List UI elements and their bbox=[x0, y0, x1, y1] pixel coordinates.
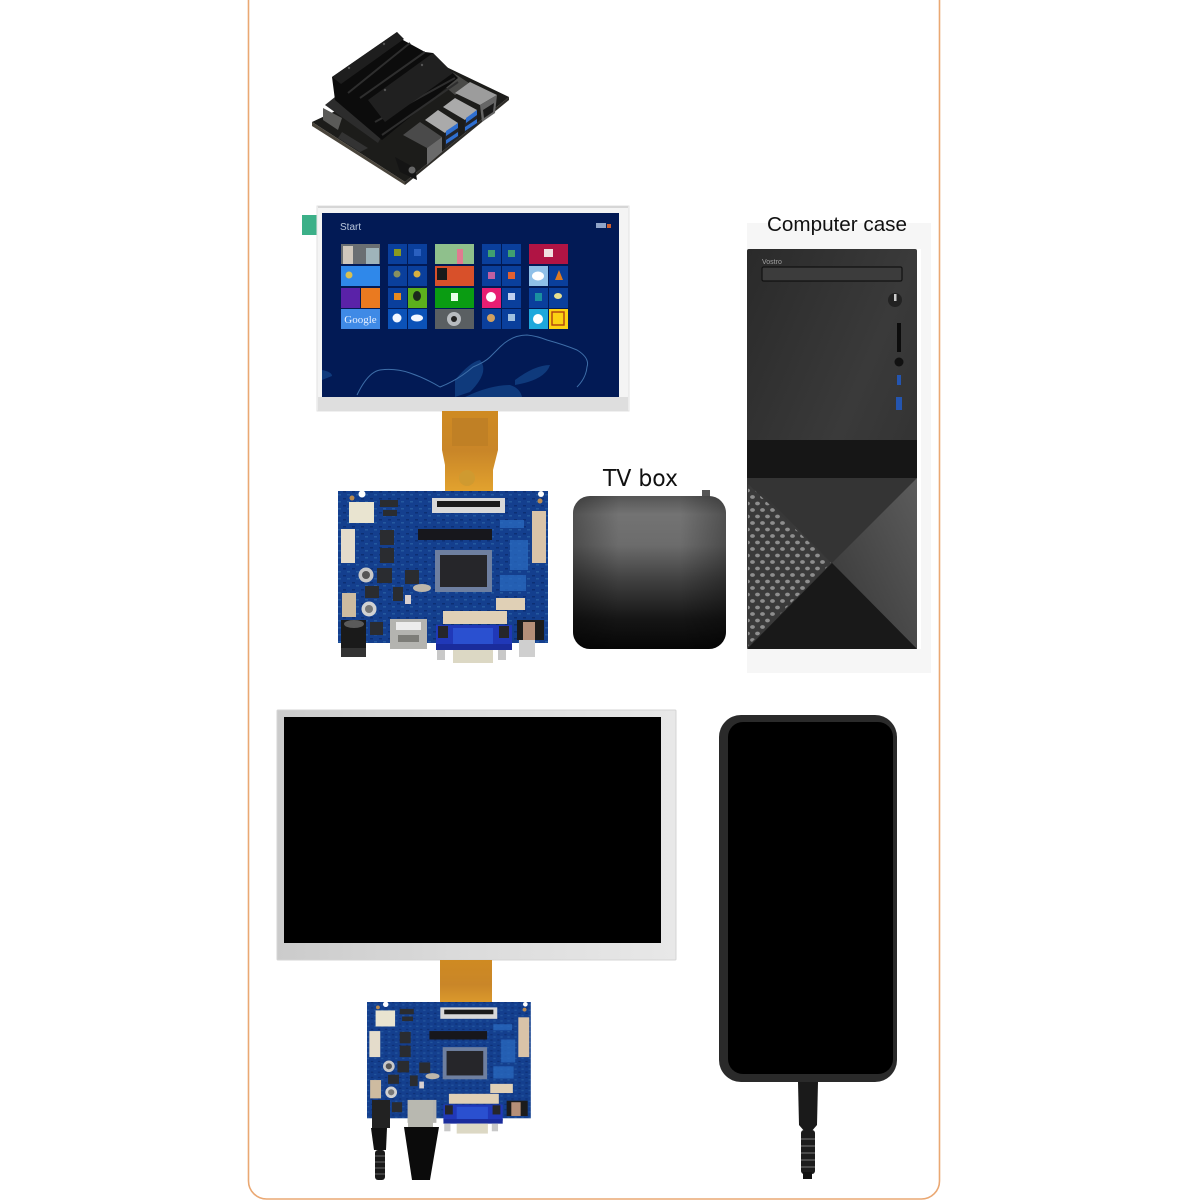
panel: flex ribbon cable bbox=[442, 411, 498, 491]
label: Computer case: Computer case bbox=[767, 213, 907, 236]
panel: black screen bbox=[284, 717, 661, 943]
icon: large display panel bbox=[277, 710, 676, 1010]
icon: USB cable bbox=[798, 1082, 818, 1179]
panel: black phone screen bbox=[728, 722, 893, 1074]
icon: display panel showing start screen bbox=[302, 206, 629, 491]
panel: navy screen bbox=[322, 213, 619, 397]
icon: controller board with plugs bbox=[367, 1002, 531, 1180]
panel: computer case backdrop bbox=[747, 223, 931, 673]
icon: smartphone with cable bbox=[719, 715, 897, 1179]
label: TV box: TV box bbox=[602, 466, 678, 492]
icon: start screen tiles: Google bbox=[344, 314, 377, 326]
icon: HDMI plug bbox=[404, 1100, 439, 1180]
panel: flex ribbon cable bbox=[440, 960, 492, 1010]
chart: wavy wallpaper lines bbox=[322, 335, 588, 397]
text: start heading: Start bbox=[340, 222, 361, 233]
icon: computer case: Vostro bbox=[762, 259, 782, 266]
panel: rounded orange outline card bbox=[248, 0, 940, 1199]
icon: DC power plug bbox=[371, 1100, 390, 1180]
icon: developer board with heatsink bbox=[312, 32, 509, 185]
icon: start screen tiles bbox=[341, 244, 568, 329]
panel: silver display frame bbox=[317, 206, 629, 411]
icon: controller board bbox=[338, 490, 548, 663]
icon: TV box bbox=[573, 490, 726, 649]
icon: computer case bbox=[747, 249, 921, 649]
